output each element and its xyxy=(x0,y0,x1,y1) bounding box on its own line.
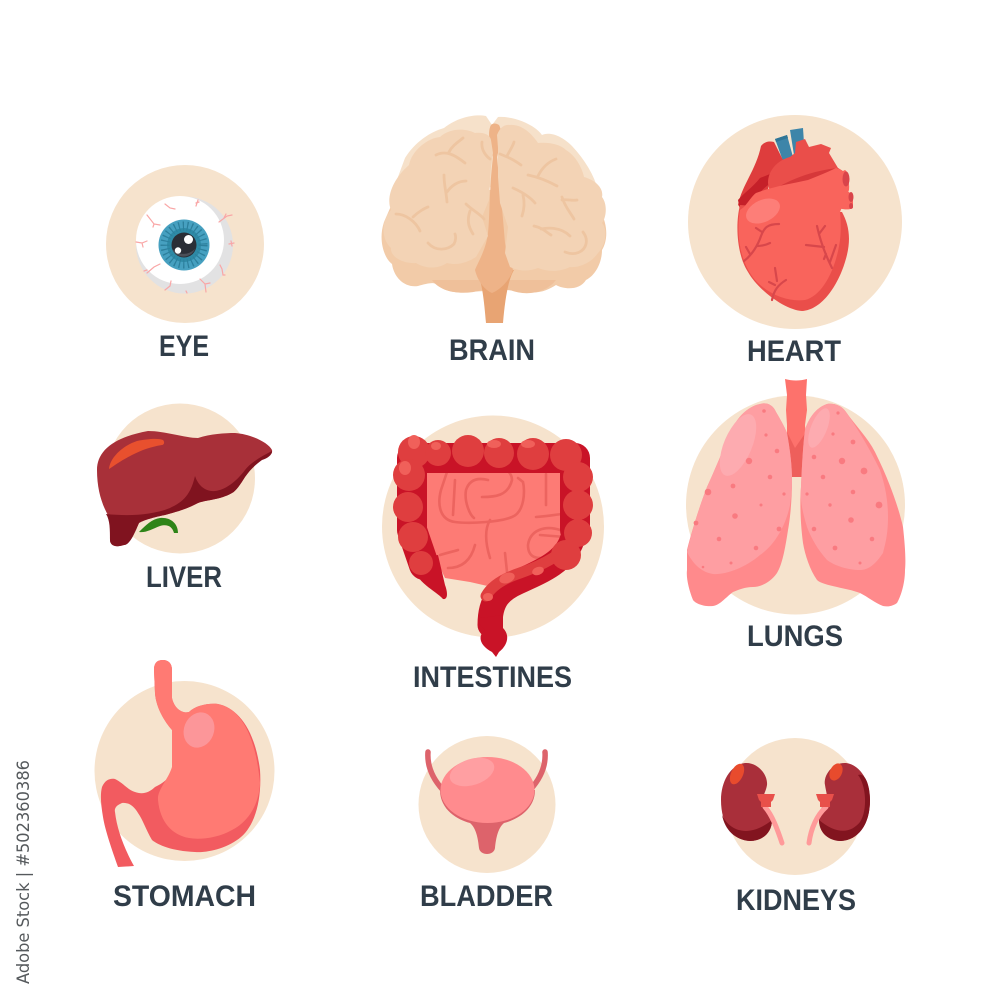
renal pelvis xyxy=(757,794,834,807)
pupil xyxy=(172,232,196,258)
panel: intestines xyxy=(382,416,604,694)
right hemisphere xyxy=(497,125,606,271)
colon dark body xyxy=(412,458,575,565)
lung spots xyxy=(694,409,882,568)
icon: stomach xyxy=(101,660,260,867)
left atrium xyxy=(738,141,783,212)
right lung xyxy=(800,404,905,606)
left hemisphere xyxy=(383,130,493,268)
ventricle back xyxy=(737,205,849,311)
label: intestines: INTESTINES xyxy=(413,661,572,694)
iris xyxy=(158,220,210,270)
ventricle front xyxy=(739,168,849,300)
stock id side text: Adobe Stock | #502360386 xyxy=(14,760,34,984)
highlight xyxy=(742,193,784,229)
icon: lungs xyxy=(687,379,905,606)
right ureter xyxy=(809,807,826,843)
liver background circle xyxy=(105,404,255,554)
icon: heart xyxy=(737,128,854,311)
blue vessels xyxy=(775,135,793,161)
label: lungs: LUNGS xyxy=(747,620,843,653)
icon: gallbladder xyxy=(139,518,178,533)
sulci xyxy=(396,138,586,254)
coronary branches xyxy=(744,224,836,300)
arch xyxy=(768,139,844,198)
panel: liver xyxy=(97,404,272,594)
label: kidneys: KIDNEYS xyxy=(736,884,856,917)
left ureter xyxy=(765,807,782,843)
panel: bladder xyxy=(418,736,556,913)
icon: intestines xyxy=(393,435,593,657)
lungs background circle xyxy=(686,396,905,614)
panel: lungs xyxy=(686,379,905,653)
eye background circle xyxy=(106,165,264,323)
panel: kidneys xyxy=(721,738,870,917)
label: liver: LIVER xyxy=(146,561,222,594)
label: brain: BRAIN xyxy=(449,334,535,367)
heart background circle xyxy=(688,115,902,329)
brain stem xyxy=(476,270,514,323)
intestines background circle xyxy=(382,416,604,638)
icon: liver xyxy=(97,431,272,546)
panel: eye xyxy=(106,165,264,363)
stomach background circle xyxy=(94,681,274,861)
icon: bladder xyxy=(428,752,545,854)
kidneys background circle xyxy=(726,738,864,875)
label: bladder: BLADDER xyxy=(420,880,553,913)
small intestine xyxy=(427,465,567,590)
left kidney xyxy=(721,763,772,841)
right kidney xyxy=(819,763,870,841)
icon: brain xyxy=(382,115,606,323)
label: heart: HEART xyxy=(747,335,841,368)
label: eye: EYE xyxy=(159,330,209,363)
panel: brain xyxy=(382,115,606,367)
icon: kidneys xyxy=(721,761,870,843)
colon lobes xyxy=(393,435,593,596)
label: stomach: STOMACH xyxy=(113,880,256,913)
panel: stomach xyxy=(94,660,274,913)
bladder background circle xyxy=(418,736,556,873)
left lung xyxy=(687,403,792,606)
colon highlights xyxy=(399,435,545,601)
trachea xyxy=(785,379,807,477)
panel: heart xyxy=(688,115,902,368)
ureters xyxy=(428,752,545,790)
icon: eyeball xyxy=(136,196,234,294)
